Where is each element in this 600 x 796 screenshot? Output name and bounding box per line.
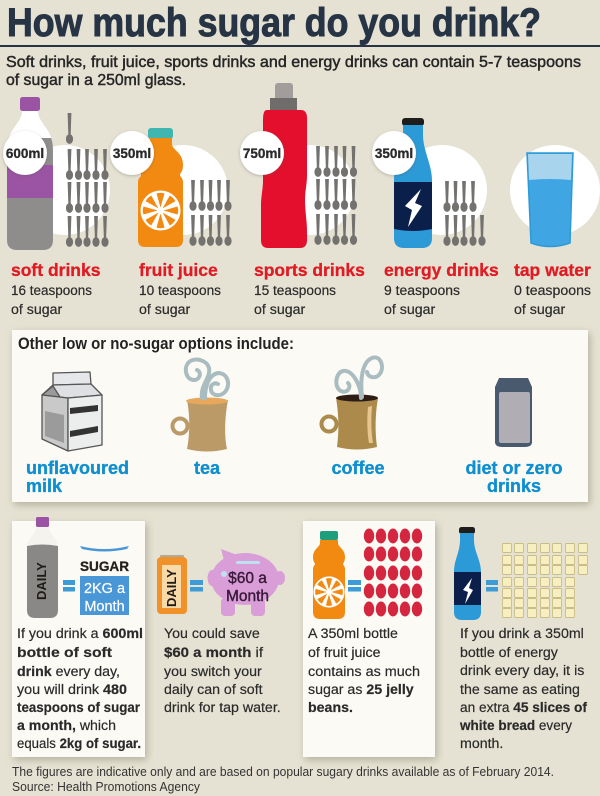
label — [11, 260, 101, 318]
text: drink for tap water. — [164, 700, 281, 716]
label: of sugar — [384, 302, 436, 318]
text: $60 a month if — [164, 645, 263, 661]
label: 10 teaspoons — [139, 283, 221, 299]
text: sugar as 25 jelly — [308, 682, 414, 698]
intro text: of sugar in a 250ml glass. — [6, 72, 186, 89]
text: the same as eating — [460, 682, 580, 698]
fact: savings — [157, 549, 285, 716]
option labels: unflavoured — [26, 458, 129, 478]
icon: coffee mug — [322, 357, 382, 450]
icon: sugar bag — [80, 546, 129, 615]
icon: piggy bank: $60 a — [228, 570, 267, 587]
label: 15 teaspoons — [254, 283, 336, 299]
volume badge: 750ml — [243, 146, 281, 161]
equals sign — [348, 580, 361, 592]
text: contains as much — [308, 664, 420, 680]
spoons: 10 teaspoons — [189, 180, 232, 246]
option labels: milk — [26, 476, 63, 496]
icon: diet drink can — [495, 378, 532, 447]
title rule — [0, 45, 600, 47]
volume badge — [110, 131, 154, 175]
label — [254, 260, 365, 318]
text: drink every day, — [17, 664, 120, 680]
label — [514, 260, 591, 318]
text: A 350ml bottle — [308, 626, 398, 642]
text: daily can of soft — [164, 682, 263, 698]
text: of fruit juice — [308, 645, 381, 661]
panel: jelly beans — [303, 521, 435, 757]
text: bottle of energy — [460, 645, 559, 661]
option labels — [26, 458, 563, 496]
panel: 2kg of sugar — [12, 517, 145, 757]
volume badge: 350ml — [113, 146, 151, 161]
icon: piggy bank: Month — [226, 588, 269, 605]
label: sports drinks — [254, 260, 365, 280]
volume badge: 350ml — [375, 146, 413, 161]
label: of sugar — [254, 302, 306, 318]
label: of sugar — [11, 302, 63, 318]
intro text: Soft drinks, fruit juice, sports drinks and energy drinks can contain 5-7 teaspoons — [6, 54, 581, 71]
intro text — [6, 54, 581, 89]
icon: piggy bank — [208, 549, 285, 616]
text: If you drink a 350ml — [460, 626, 584, 642]
volume badge: 600ml — [6, 146, 44, 161]
label: energy drinks — [384, 260, 499, 280]
label: 0 teaspoons — [514, 283, 591, 299]
label: 9 teaspoons — [384, 283, 460, 299]
icon: tea mug — [172, 360, 228, 452]
footnote and source: Source: Health Promotions Agency — [12, 780, 201, 794]
bottle: fruit juice — [138, 128, 183, 247]
spoons: 9 teaspoons — [443, 181, 486, 246]
label: soft drinks — [11, 260, 101, 280]
drink: sports drinks — [240, 83, 365, 318]
icon: sugar bag: SUGAR — [80, 558, 129, 574]
equals sign — [486, 580, 498, 592]
option labels: tea — [194, 458, 221, 478]
bottle: energy drink — [394, 118, 432, 248]
text: If you drink a 600ml — [17, 626, 143, 642]
icon: daily soft drink bottle — [27, 517, 58, 618]
icon: daily soft drink bottle: DAILY — [34, 562, 49, 600]
icon: daily can: DAILY — [164, 569, 179, 607]
bottle: sports drink — [261, 83, 307, 248]
volume badge — [372, 131, 416, 175]
text: month. — [460, 736, 503, 752]
text: an extra 45 slices of — [460, 700, 587, 716]
text: You could save — [164, 626, 260, 642]
spoons: 16 teaspoons — [66, 113, 109, 247]
spoons: 15 teaspoons — [314, 146, 357, 245]
panel: other low or no-sugar options — [12, 330, 588, 502]
footnote and source — [12, 765, 554, 794]
text: beans. — [308, 700, 353, 716]
text: a month, which — [17, 718, 116, 734]
volume badge — [3, 131, 47, 175]
icon: glass of water — [527, 153, 573, 246]
icon: sugar bag: Month — [84, 599, 125, 615]
icon: 25 jelly beans — [364, 528, 422, 616]
text: you will drink 480 — [17, 682, 127, 698]
icon: 45 slices of bread — [502, 544, 588, 618]
option labels: diet or zero — [465, 458, 563, 478]
label: of sugar — [514, 302, 566, 318]
drink: energy drinks — [372, 118, 499, 318]
text: teaspoons of sugar — [17, 700, 140, 716]
icon: milk carton — [42, 372, 102, 451]
bottle: soft drink — [7, 97, 53, 250]
footnote and source: The figures are indicative only and are based on popular sugary drinks available as of February 2014. — [12, 765, 554, 779]
icon: daily can — [157, 555, 187, 614]
drink: fruit juice — [110, 128, 232, 318]
fact: white bread — [454, 527, 588, 752]
volume badge — [240, 131, 284, 175]
text: bottle of soft — [17, 645, 112, 661]
equals sign — [63, 580, 75, 592]
label: fruit juice — [139, 260, 218, 280]
icon: sugar bag: 2KG a — [84, 581, 126, 597]
label — [139, 260, 221, 318]
text: you switch your — [164, 664, 262, 680]
option labels: coffee — [331, 458, 385, 478]
text: equals 2kg of sugar. — [17, 736, 141, 752]
drink: tap water — [510, 145, 600, 318]
icon: energy drink bottle — [454, 527, 481, 620]
icon: juice bottle — [313, 531, 345, 619]
drink: soft drinks — [0, 97, 110, 318]
option labels: drinks — [487, 476, 541, 496]
title: How much sugar do you drink? — [7, 1, 541, 45]
label: tap water — [514, 260, 591, 280]
text — [17, 626, 143, 752]
text — [164, 626, 281, 716]
text: white bread every — [459, 718, 573, 734]
panel heading: Other low or no-sugar options include: — [18, 334, 294, 353]
label — [384, 260, 499, 318]
label: 16 teaspoons — [11, 283, 92, 299]
label: of sugar — [139, 302, 191, 318]
equals sign — [190, 580, 203, 592]
text: drink every day, it is — [460, 663, 584, 679]
text — [308, 626, 420, 716]
text — [459, 626, 587, 752]
